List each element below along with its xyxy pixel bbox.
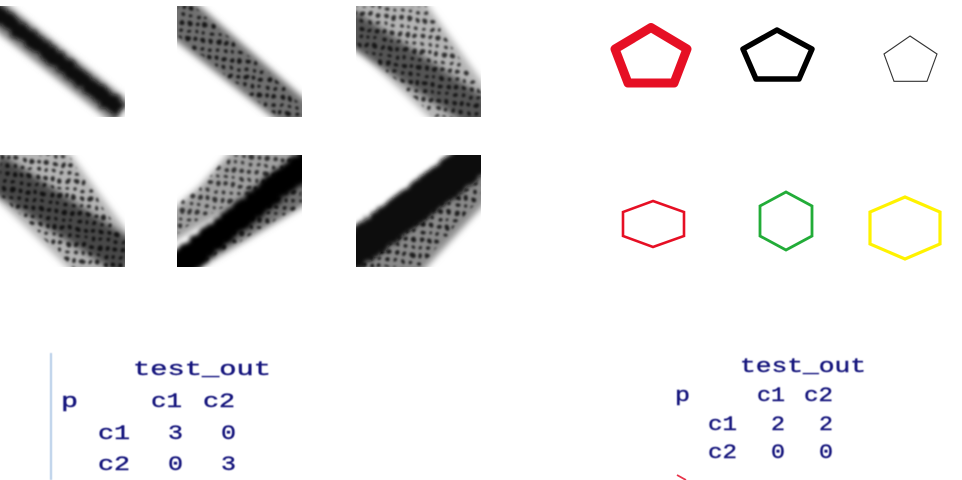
image: double diagonal stroke rising to the right (177, 155, 302, 267)
table: left confusion matrix: c1 (98, 423, 130, 446)
icon: thin pentagon (884, 36, 937, 81)
table: right confusion matrix: c1 (708, 414, 737, 437)
table: right confusion matrix: 0 (771, 442, 785, 465)
table: left confusion matrix: 0 (221, 423, 236, 446)
table: left confusion matrix: 3 (221, 454, 236, 477)
icon: red hexagon (623, 201, 684, 247)
icon: black pentagon (743, 30, 812, 79)
table: right confusion matrix: test_out (740, 356, 866, 379)
table: right confusion matrix: 0 (819, 442, 833, 465)
icon: green hexagon (760, 192, 812, 250)
table: left confusion matrix: p (61, 391, 78, 414)
icon: yellow hexagon (870, 197, 940, 259)
image: medium diagonal stroke with dotted texture (177, 6, 302, 117)
table: left confusion matrix: c2 (203, 391, 235, 414)
image: wide diagonal stroke, lower row left (0, 155, 125, 267)
table: right confusion matrix: 2 (819, 414, 833, 437)
table: left confusion matrix (50, 353, 271, 480)
table: right confusion matrix (675, 356, 866, 465)
table: right confusion matrix: c2 (708, 442, 737, 465)
table: right confusion matrix: c2 (804, 385, 833, 408)
table: right confusion matrix: 2 (771, 414, 785, 437)
table: left confusion matrix: 0 (168, 454, 183, 477)
table: left confusion matrix: test_out (133, 359, 271, 382)
image: wide diagonal stroke with dotted texture (356, 6, 481, 117)
table: left confusion matrix: 3 (168, 423, 183, 446)
table: right confusion matrix: p (675, 385, 690, 408)
table: right confusion matrix: c1 (757, 385, 785, 408)
red mark at bottom edge (677, 475, 686, 480)
image: narrow dark diagonal stroke (0, 5, 122, 113)
table: left confusion matrix: c2 (98, 454, 130, 477)
image: thick dark diagonal stroke rising to the right (356, 155, 481, 267)
icon: thick red pentagon (615, 28, 687, 83)
table: left confusion matrix: c1 (151, 391, 182, 414)
